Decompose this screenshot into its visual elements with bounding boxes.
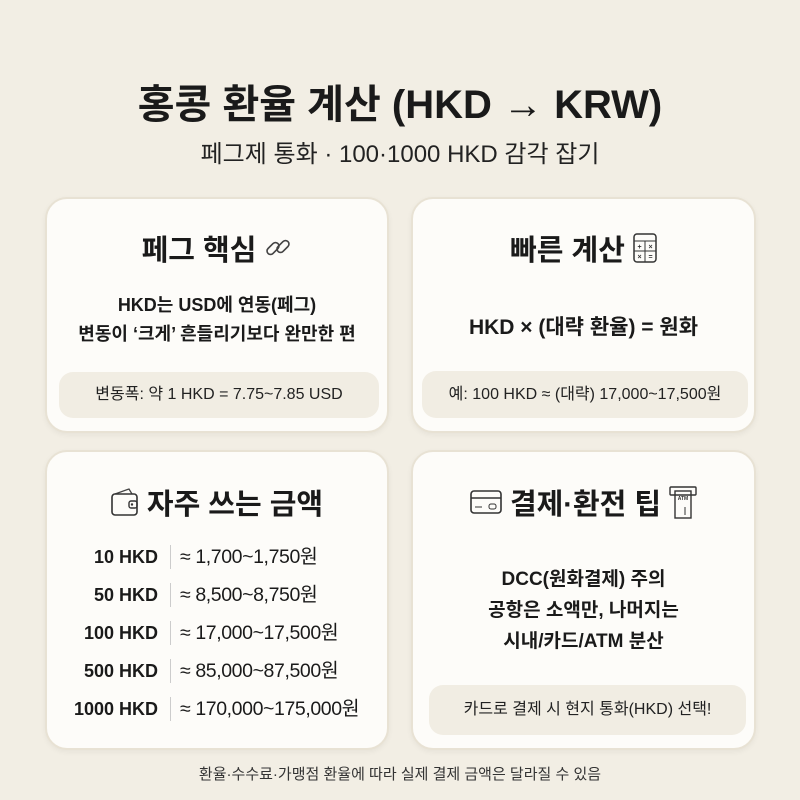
icon: calculator: ×	[637, 254, 641, 261]
panel: payment tips	[411, 450, 756, 750]
icon: ATM	[669, 486, 697, 519]
table: amounts: ≈ 17,000~17,500원	[180, 622, 338, 644]
table: amounts: 50 HKD	[94, 585, 158, 605]
table: amounts: ≈ 1,700~1,750원	[180, 546, 317, 568]
panel: quick calc	[411, 197, 756, 433]
icon: card	[470, 490, 502, 514]
text: peg description: HKD는 USD에 연동(페그)	[118, 295, 316, 315]
heading: quick calc: 빠른 계산	[510, 235, 625, 267]
heading: common amounts: 자주 쓰는 금액	[147, 489, 323, 521]
table: amounts: ≈ 8,500~8,750원	[180, 584, 317, 606]
callout: choose HKD: 카드로 결제 시 현지 통화(HKD) 선택!	[464, 701, 711, 718]
panel: peg	[45, 197, 389, 433]
table: amounts	[74, 545, 359, 721]
callout: example: 예: 100 HKD ≈ (대략) 17,000~17,500원	[449, 386, 721, 403]
callout: band: 변동폭: 약 1 HKD = 7.75~7.85 USD	[95, 386, 343, 403]
text: peg description	[78, 295, 356, 344]
table: amounts: 500 HKD	[84, 661, 158, 681]
callout: band	[59, 372, 379, 418]
icon: calculator: ×	[648, 244, 652, 251]
heading: payment tips: 결제·환전 팁	[510, 489, 661, 521]
text: peg description: 변동이 ‘크게’ 흔들리기보다 완만한 편	[78, 324, 356, 344]
text: tips: DCC(원화결제) 주의	[502, 569, 665, 590]
icon: wallet	[111, 488, 138, 516]
text: formula: HKD × (대략 환율) = 원화	[469, 316, 698, 339]
table: amounts: 10 HKD	[94, 547, 158, 567]
heading: peg: 페그 핵심	[142, 235, 256, 267]
footer note: 환율·수수료·가맹점 환율에 따라 실제 결제 금액은 달라질 수 있음	[199, 766, 601, 783]
table: amounts: 100 HKD	[84, 623, 158, 643]
text: tips	[488, 569, 679, 652]
icon: calculator	[633, 233, 657, 263]
icon: ATM: ATM	[678, 496, 688, 502]
table: amounts: ≈ 170,000~175,000원	[180, 698, 359, 720]
table: amounts: ≈ 85,000~87,500원	[180, 660, 338, 682]
text: tips: 시내/카드/ATM 분산	[503, 631, 664, 652]
heading: payment tips	[470, 486, 697, 521]
callout: example	[422, 371, 748, 418]
icon: link	[266, 240, 290, 256]
callout: choose HKD	[429, 685, 746, 735]
table: amounts: 1000 HKD	[74, 699, 158, 719]
icon: calculator: +	[637, 244, 641, 251]
title: 홍콩 환율 계산 (HKD → KRW)	[138, 83, 662, 127]
panel: common amounts	[45, 450, 389, 750]
icon: calculator: =	[648, 254, 652, 261]
text: tips: 공항은 소액만, 나머지는	[488, 600, 679, 621]
subtitle: 페그제 통화 · 100·1000 HKD 감각 잡기	[201, 141, 599, 168]
